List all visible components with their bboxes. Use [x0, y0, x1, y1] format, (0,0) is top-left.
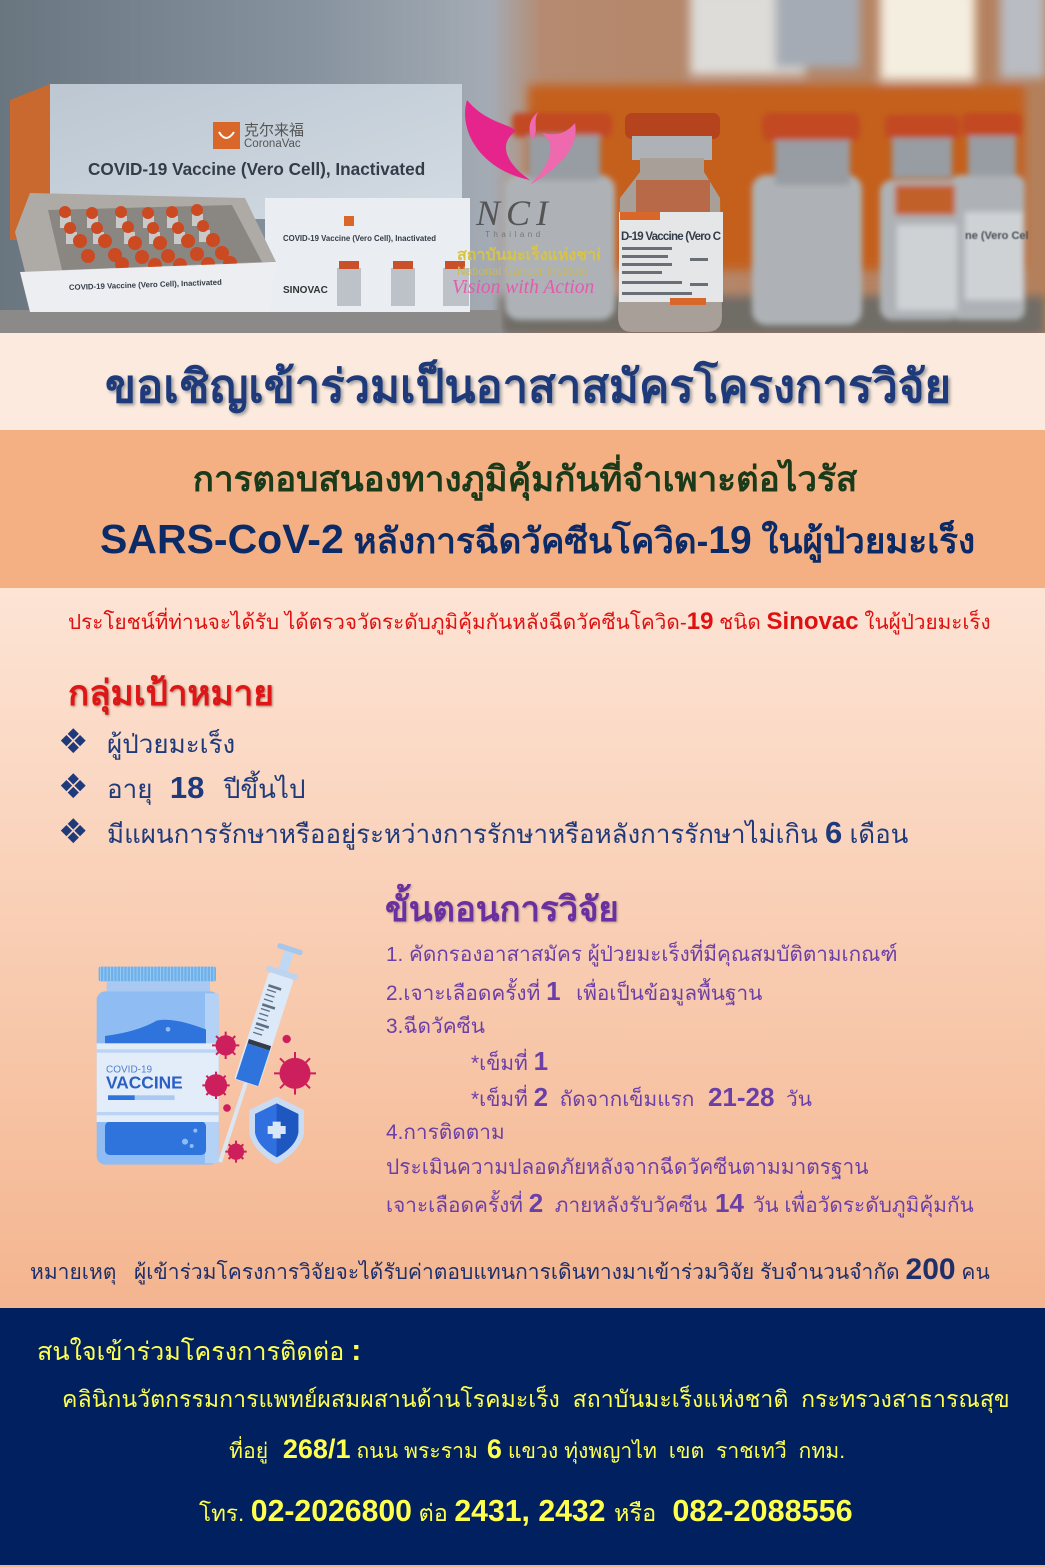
safety assessment: ประเมินความปลอดภัยหลังจากฉีดวัคซีนตามมาตรฐาน: [386, 1156, 869, 1179]
header photo: vaccine boxes and vials: ne (Vero Cel: [965, 230, 1029, 242]
step 3: 3.ฉีดวัคซีน: [386, 1015, 485, 1038]
subtitle line 2: SARS-CoV-2 หลังการฉีดวัคซีนโควิด-19 ในผู้ป่วยมะเร็ง: [100, 516, 975, 562]
icon: pink butterfly: [465, 100, 576, 185]
heading: invitation: ขอเชิญเข้าร่วมเป็นอาสาสมัครโครงการวิจัย: [105, 361, 951, 412]
target group list: [58, 722, 908, 852]
note: หมายเหตุ ผู้เข้าร่วมโครงการวิจัยจะได้รับค่าตอบแทนการเดินทางมาเข้าร่วมวิจัย รับจำนวนจำกัด 200 คน: [30, 1253, 990, 1286]
logo: National Cancer Institute: Thailand: [485, 230, 544, 239]
header photo: vaccine boxes and vials: SINOVAC: [283, 285, 328, 296]
target group list: ❖: [58, 722, 88, 762]
clinic name: คลินิกนวัตกรรมการแพทย์ผสมผสานด้านโรคมะเร็ง สถาบันมะเร็งแห่งชาติ กระทรวงสาธารณสุข: [62, 1386, 1010, 1412]
bottle: [97, 967, 219, 1165]
subtitle band: [0, 430, 1045, 588]
logo: National Cancer Institute: National Cancer Institute: [457, 264, 589, 278]
bottle: VACCINE: [106, 1072, 183, 1092]
sharp vial: D-19 Vaccine (Vero C: [621, 231, 721, 243]
title band: [0, 333, 1045, 430]
shield: [249, 1097, 304, 1164]
heading: target group: กลุ่มเป้าหมาย: [68, 674, 274, 713]
subtitle line 1: การตอบสนองทางภูมิคุ้มกันที่จำเพาะต่อไวรัส: [193, 460, 857, 499]
tray and small box: [265, 198, 470, 312]
header photo: vaccine boxes and vials: CoronaVac: [244, 138, 301, 150]
blurred vials: [505, 113, 1025, 325]
header photo: vaccine boxes and vials: COVID-19 Vaccine (Vero Cell), Inactivated: [88, 159, 425, 179]
heading: research steps: ขั้นตอนการวิจัย: [385, 891, 619, 929]
target group list: ❖: [58, 812, 88, 852]
dose 2: *เข็มที่ 2 ถัดจากเข็มแรก 21-28 วัน: [471, 1082, 812, 1112]
illustration: vaccine bottle and syringe: [96, 943, 316, 1165]
target group list: ผู้ป่วยมะเร็ง: [107, 729, 235, 759]
list item 3: [58, 812, 908, 852]
step 4: 4.การติดตาม: [386, 1121, 505, 1144]
bottle: COVID-19: [106, 1064, 153, 1075]
body background: [0, 588, 1045, 1308]
phone: โทร. 02-2026800 ต่อ 2431, 2432 หรือ 082-2088556: [199, 1494, 853, 1528]
header photo: vaccine boxes and vials: [0, 0, 1045, 333]
step 2: 2.เจาะเลือดครั้งที่ 1 เพื่อเป็นข้อมูลพื้นฐาน: [386, 976, 762, 1006]
dose 1: *เข็มที่ 1: [471, 1046, 548, 1076]
header photo: vaccine boxes and vials: COVID-19 Vaccine (Vero Cell), Inactivated: [283, 234, 436, 243]
target group list: มีแผนการรักษาหรืออยู่ระหว่างการรักษาหรือหลังการรักษาไม่เกิน 6 เดือน: [107, 815, 908, 850]
second blood draw: เจาะเลือดครั้งที่ 2 ภายหลังรับวัคซีน 14 วัน เพื่อวัดระดับภูมิคุ้มกัน: [386, 1188, 974, 1218]
logo: National Cancer Institute: [452, 100, 600, 298]
benefit line: ประโยชน์ที่ท่านจะได้รับ ได้ตรวจวัดระดับภูมิคุ้มกันหลังฉีดวัคซีนโควิด-19 ชนิด Sinovac ในผู้ป่วยมะเร็ง: [68, 608, 991, 635]
header photo: vaccine boxes and vials: COVID-19 Vaccine (Vero Cell), Inactivated: [69, 278, 222, 292]
list item 1: [58, 722, 235, 762]
sharp vial: [618, 113, 723, 332]
logo: National Cancer Institute: NCI: [475, 193, 554, 233]
logo: National Cancer Institute: Vision with Action: [452, 277, 594, 298]
virus particles: [202, 1032, 316, 1163]
target group list: ❖: [58, 767, 88, 807]
footer panel: contact: [0, 1308, 1045, 1565]
step 1: 1. คัดกรองอาสาสมัคร ผู้ป่วยมะเร็งที่มีคุณสมบัติตามเกณฑ์: [386, 943, 898, 966]
target group list: อายุ 18 ปีขึ้นไป: [107, 770, 305, 805]
research steps list: [386, 940, 974, 1218]
contact heading: สนใจเข้าร่วมโครงการติดต่อ :: [37, 1334, 361, 1367]
list item 2: [58, 767, 305, 807]
address: ที่อยู่ 268/1 ถนน พระราม 6 แขวง ทุ่งพญาไท เขต ราชเทวี กทม.: [229, 1434, 845, 1464]
header photo: vaccine boxes and vials: 克尔来福: [244, 119, 304, 140]
large box: [10, 84, 50, 240]
syringe: [205, 942, 306, 1167]
